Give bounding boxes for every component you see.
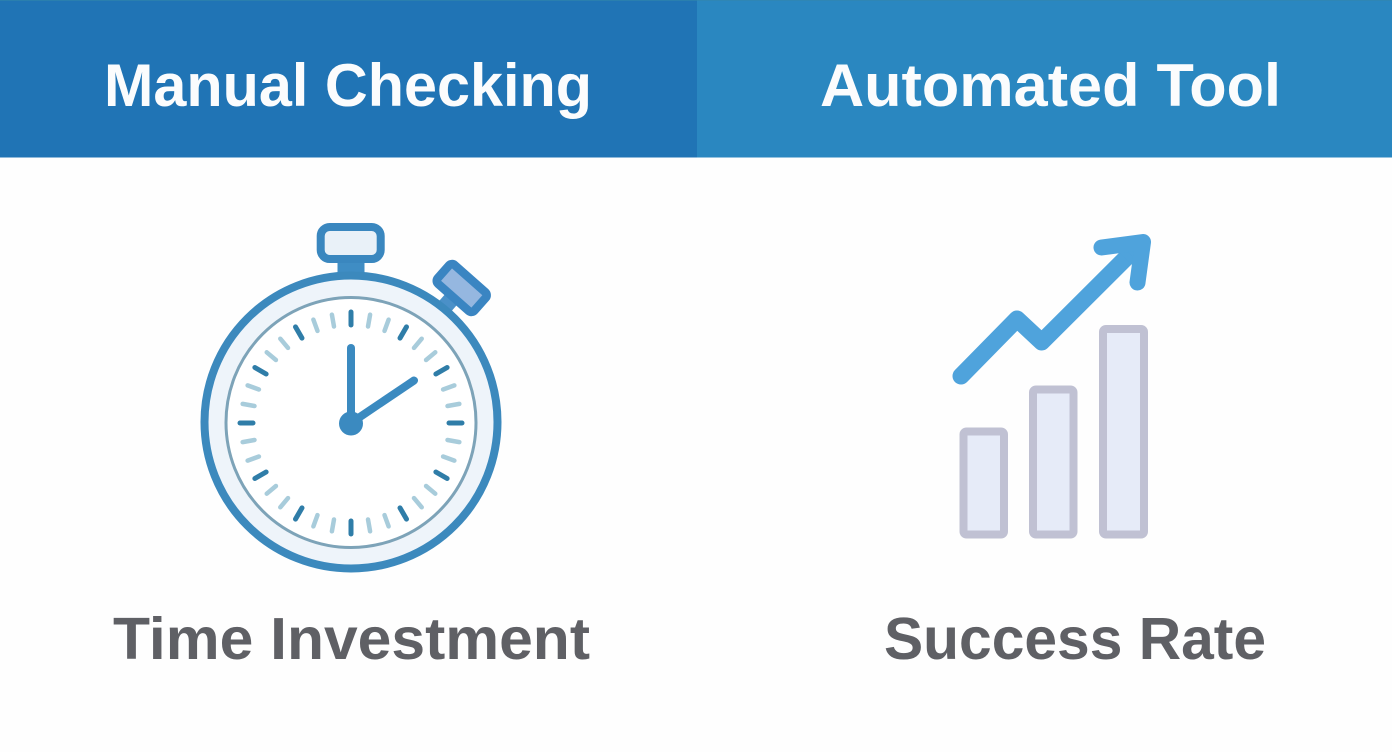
panel: Manual Checking header [0, 0, 697, 158]
stopwatch top stem [338, 260, 364, 276]
stopwatch minor ticks [243, 315, 459, 531]
heading: Automated Tool: Automated Tool [820, 52, 1281, 119]
icon: growth bar chart with arrow [961, 242, 1144, 534]
stopwatch dial face [226, 298, 476, 548]
stopwatch side stem [435, 289, 461, 317]
heading: Manual Checking: Manual Checking [104, 52, 592, 119]
label: Success Rate: Success Rate [884, 606, 1266, 672]
stopwatch hands [351, 348, 414, 423]
stopwatch major ticks [240, 312, 462, 534]
icon: stopwatch [204, 227, 498, 568]
bar chart [964, 329, 1144, 534]
stopwatch top button [321, 227, 381, 259]
panel: Automated Tool header [697, 0, 1392, 158]
label: Time Investment: Time Investment [113, 606, 590, 672]
stopwatch outer ring [204, 276, 498, 568]
arrow: upward trend [961, 242, 1143, 376]
stopwatch hub [339, 412, 363, 436]
stopwatch side button [435, 262, 488, 314]
